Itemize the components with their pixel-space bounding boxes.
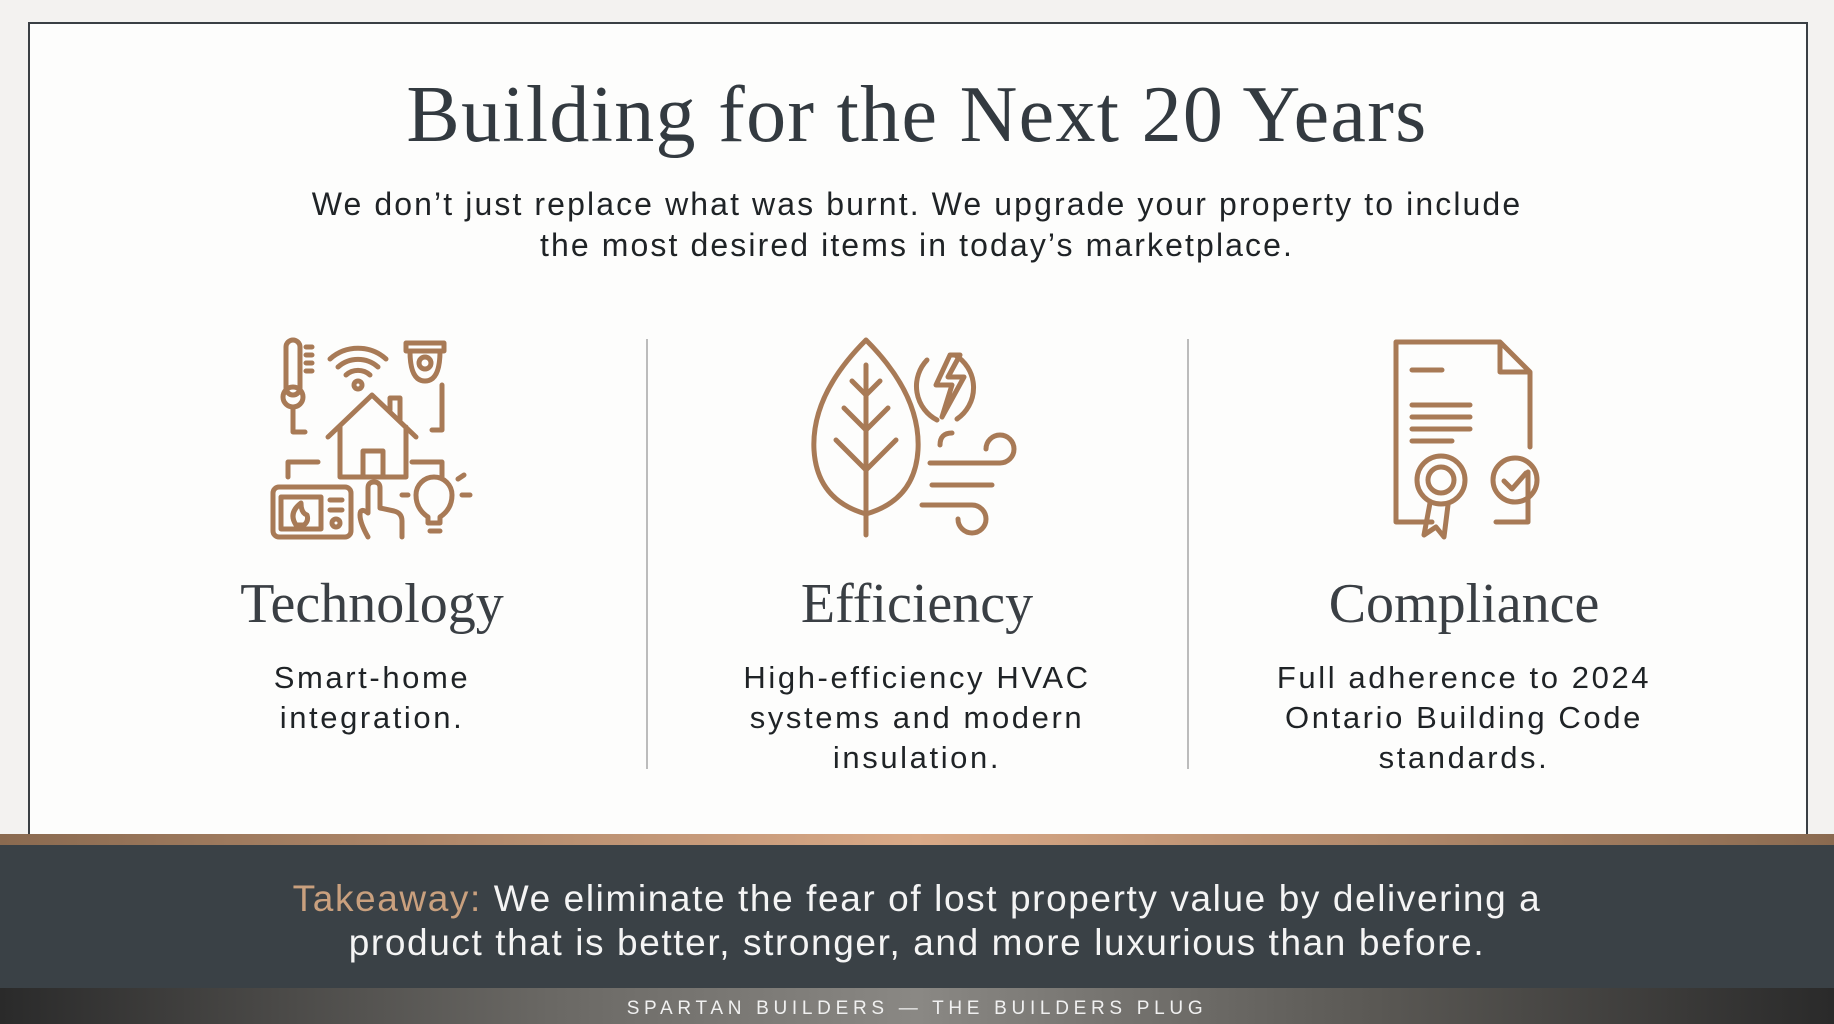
- frame panel: [28, 22, 1808, 852]
- icon: smart home: [270, 338, 472, 540]
- subtitle: the most desired items in today’s marketplace.: [540, 227, 1294, 263]
- column: efficiency: Efficiency: [801, 573, 1033, 635]
- subtitle: [312, 186, 1522, 263]
- column: efficiency: insulation.: [833, 740, 1001, 775]
- takeaway text: Takeaway: We eliminate the fear of lost property value by delivering a: [293, 878, 1541, 919]
- column: technology: Technology: [240, 573, 504, 635]
- column: technology: integration.: [280, 700, 464, 735]
- column: compliance: Ontario Building Code: [1285, 700, 1643, 735]
- takeaway text: product that is better, stronger, and more luxurious than before.: [349, 922, 1485, 963]
- takeaway band: [0, 845, 1834, 988]
- column: compliance: Compliance: [1329, 573, 1599, 635]
- column: efficiency: systems and modern: [750, 700, 1084, 735]
- column: compliance: [1277, 573, 1651, 775]
- title: Building for the Next 20 Years: [406, 71, 1428, 159]
- takeaway text: [293, 878, 1541, 963]
- column: efficiency: [743, 573, 1091, 775]
- footer text: SPARTAN BUILDERS — THE BUILDERS PLUG: [627, 998, 1207, 1019]
- icon: compliance certificate: [1394, 340, 1540, 540]
- column: technology: Smart-home: [274, 660, 470, 695]
- icon: efficiency: [811, 338, 1016, 538]
- column: efficiency: High-efficiency HVAC: [743, 660, 1091, 695]
- subtitle: We don’t just replace what was burnt. We upgrade your property to include: [312, 186, 1522, 222]
- column: compliance: standards.: [1379, 740, 1549, 775]
- column: technology: [240, 573, 504, 735]
- column: compliance: Full adherence to 2024: [1277, 660, 1651, 695]
